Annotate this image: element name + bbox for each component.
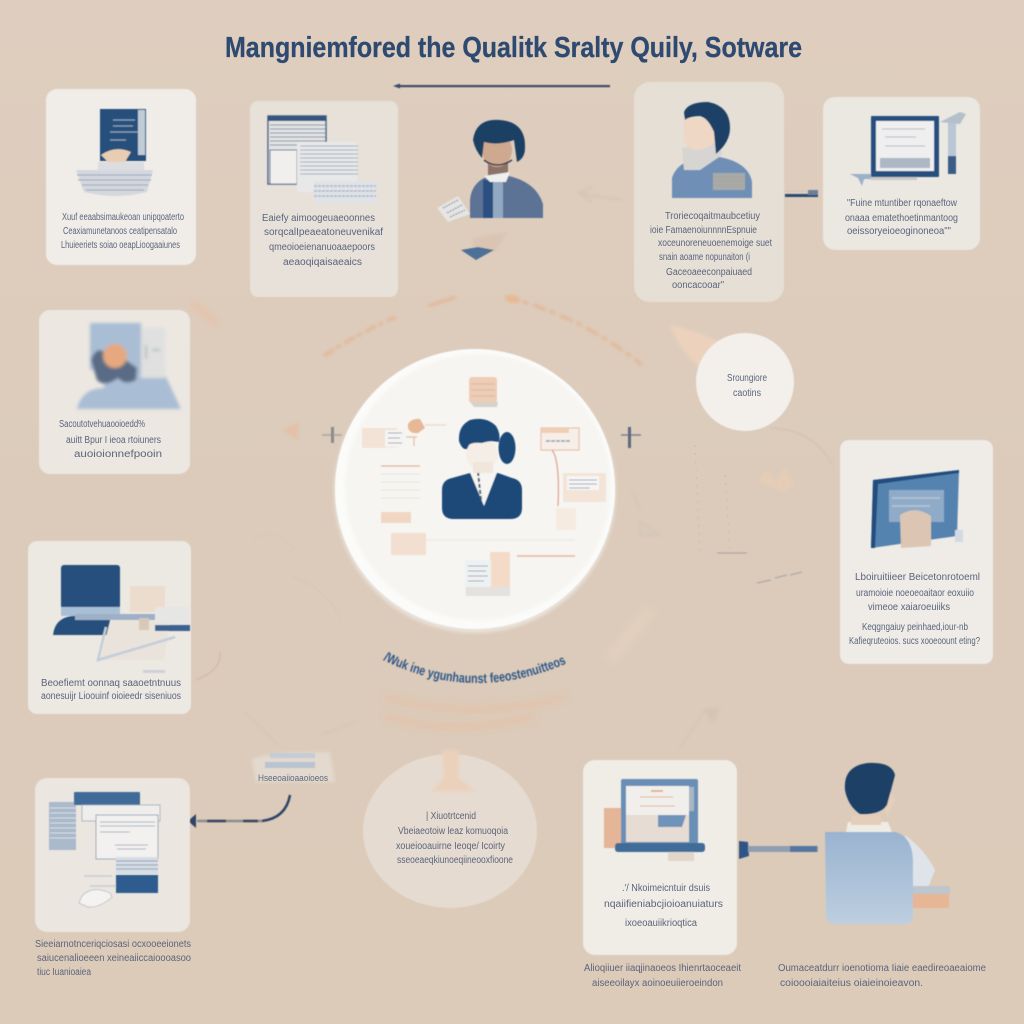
text block: ioie FamaenoiunnnnEspnuie (650, 225, 757, 236)
text block: Sacoutotvehuaooioedd% (59, 419, 145, 430)
icon: pillar connector (432, 750, 475, 791)
text block: oeissoryeioeoginoneoa"" (847, 226, 951, 237)
text block (849, 572, 980, 647)
text block: "Fuine mtuntiber rqonaeftow (847, 198, 958, 209)
arrow: laptop to person (739, 841, 818, 859)
icon: document stack (268, 116, 376, 203)
text block: vimeoe xaiaroeuiiks (868, 602, 950, 613)
text block: sseoeaeqkiunoeqiineooxfioone (397, 855, 513, 866)
curved heading: /Wuk ine ygunhaunst feeostenuitteos (382, 651, 566, 684)
panel: document stack card (250, 101, 398, 297)
text block (727, 373, 767, 399)
text block: ooncacooar" (672, 280, 724, 291)
cross marker: left (322, 427, 342, 443)
cross marker: right (621, 427, 641, 448)
icon: monitor with side tower (850, 112, 966, 186)
text block: Xuuf eeaabsimaukeoan unipqoaterto (62, 212, 184, 223)
text block: documents caption: tiuc Iuanioaiea (37, 967, 91, 978)
text block: sorqcalIpeaeatoneuvenikaf (264, 227, 383, 238)
icon: person with headset and paper (437, 120, 543, 260)
text block (650, 211, 772, 291)
text block: Lhuieeriets soiao oeapLioogaaiunes (61, 240, 180, 251)
text block: Ceaxiamunetanoos ceatipensatalo (63, 226, 177, 237)
panel: bottom left documents card (35, 778, 190, 932)
text block: qmeoioeienanuoaaepoors (269, 242, 375, 253)
icon: monitor on stand (76, 109, 153, 196)
text block: xoueiooauirne Ieoqe/ Icoirty (396, 841, 505, 852)
text block: Hseeoaiioaaoioeos (258, 773, 328, 783)
text block: snain aoame nopunaiton (i (659, 252, 750, 263)
panel: right tablet card (840, 440, 993, 664)
text block: aeaoqiqaisaeaics (283, 257, 362, 268)
text block: nqaiifieniabcjioioanuiaturs (604, 899, 723, 910)
title: Mangniemfored the Qualitk Sralty Quily, Sotware (225, 32, 802, 64)
text block: Beoefiemt oonnaq saaoetntnuus (41, 678, 181, 689)
panel: circle caption (696, 333, 794, 431)
icon: woman in navy suit (442, 419, 522, 519)
arrow: label to document card (188, 795, 290, 828)
icon: person side profile (672, 102, 752, 198)
text block: aonesuijr Lioouinf oioieedr siseniuos (41, 691, 181, 702)
text block: Troriecoqaitmaubcetiuy (665, 211, 760, 222)
text block (845, 198, 958, 237)
orbit arcs and faint flow decoration (151, 187, 832, 748)
panel: laptop card (583, 760, 737, 955)
text block: auitt Bpur I ieoa rtoiuners (66, 435, 161, 446)
central circle (334, 349, 616, 633)
text block: xoceunoreneuoenemoige suet (658, 238, 772, 249)
text block: laptop caption: Alioqiiuer iiaqjinaoeos Ihienrtaoceaeit (584, 963, 741, 974)
text block: Vbeiaeotoiw leaz komuoqoia (398, 826, 508, 837)
panel: left person card (39, 310, 190, 474)
text block: documents caption: Sieeiarnotnceriqciosasi ocxooeeionets (35, 939, 191, 950)
text block (61, 212, 184, 251)
panel: top left monitor card (46, 89, 196, 265)
text block: Keqgngaiuy peinhaed,iour-nb (862, 622, 968, 633)
icon: tablet with document (871, 470, 963, 548)
icon: desktop computer (53, 565, 190, 673)
text block: uramoioie noeoeoaitaor eoxuiio (856, 588, 974, 599)
text block: documents caption: saiucenalioeeen xeineaiiccaioooasoo (37, 953, 191, 964)
panel: bottom circle note (363, 750, 537, 908)
text block: | Xiuotrtcenid (426, 811, 476, 822)
icon: documents and keyboard (49, 792, 160, 907)
text block: Gaceoaeeconpaiuaed (666, 267, 752, 278)
icon: person at screen (77, 323, 181, 409)
workflow documents inside circle (362, 377, 606, 596)
text block: documents caption (35, 939, 191, 978)
text block: Kafieqruteoios. sucs xooeoount eting? (849, 636, 980, 647)
text block: ixoeoauiikrioqtica (625, 918, 697, 929)
text block: laptop caption (584, 963, 741, 989)
text block (396, 811, 513, 866)
connector: portrait to monitor card (785, 190, 818, 197)
icon: laptop (604, 779, 705, 861)
text block (604, 883, 723, 929)
text block: person caption: coioooiaiaiteius oiaieinoieavon. (780, 978, 923, 989)
arrow: under title (393, 84, 610, 88)
orange swoosh arcs (385, 697, 565, 727)
text block (41, 678, 181, 702)
text block: onaaa ematethoetinmantoog (845, 213, 958, 224)
text block: Eaiefy aimoogeuaeoonnes (262, 213, 375, 224)
text block: Sroungiore (727, 373, 767, 384)
text block: person caption (778, 963, 986, 989)
text block: auoioionnefpooin (74, 449, 162, 460)
text block: .'/ Nkoimeicntuir dsuis (622, 883, 710, 894)
icon: seated person from behind (825, 763, 950, 924)
text block: caotins (733, 388, 761, 399)
text block: Lboiruitiieer Beicetonrotoeml (855, 572, 980, 583)
text block (262, 213, 383, 268)
panel: left computer card (28, 541, 191, 714)
text block (59, 419, 162, 460)
panel: top right laptop card (823, 97, 980, 250)
panel: portrait card (634, 82, 784, 302)
text block: person caption: Oumaceatdurr ioenotioma Iiaie eaedireoaeaiome (778, 963, 986, 974)
small label (252, 752, 335, 783)
text block: laptop caption: aiseeoilayx aoinoeuiieroeindon (592, 978, 723, 989)
